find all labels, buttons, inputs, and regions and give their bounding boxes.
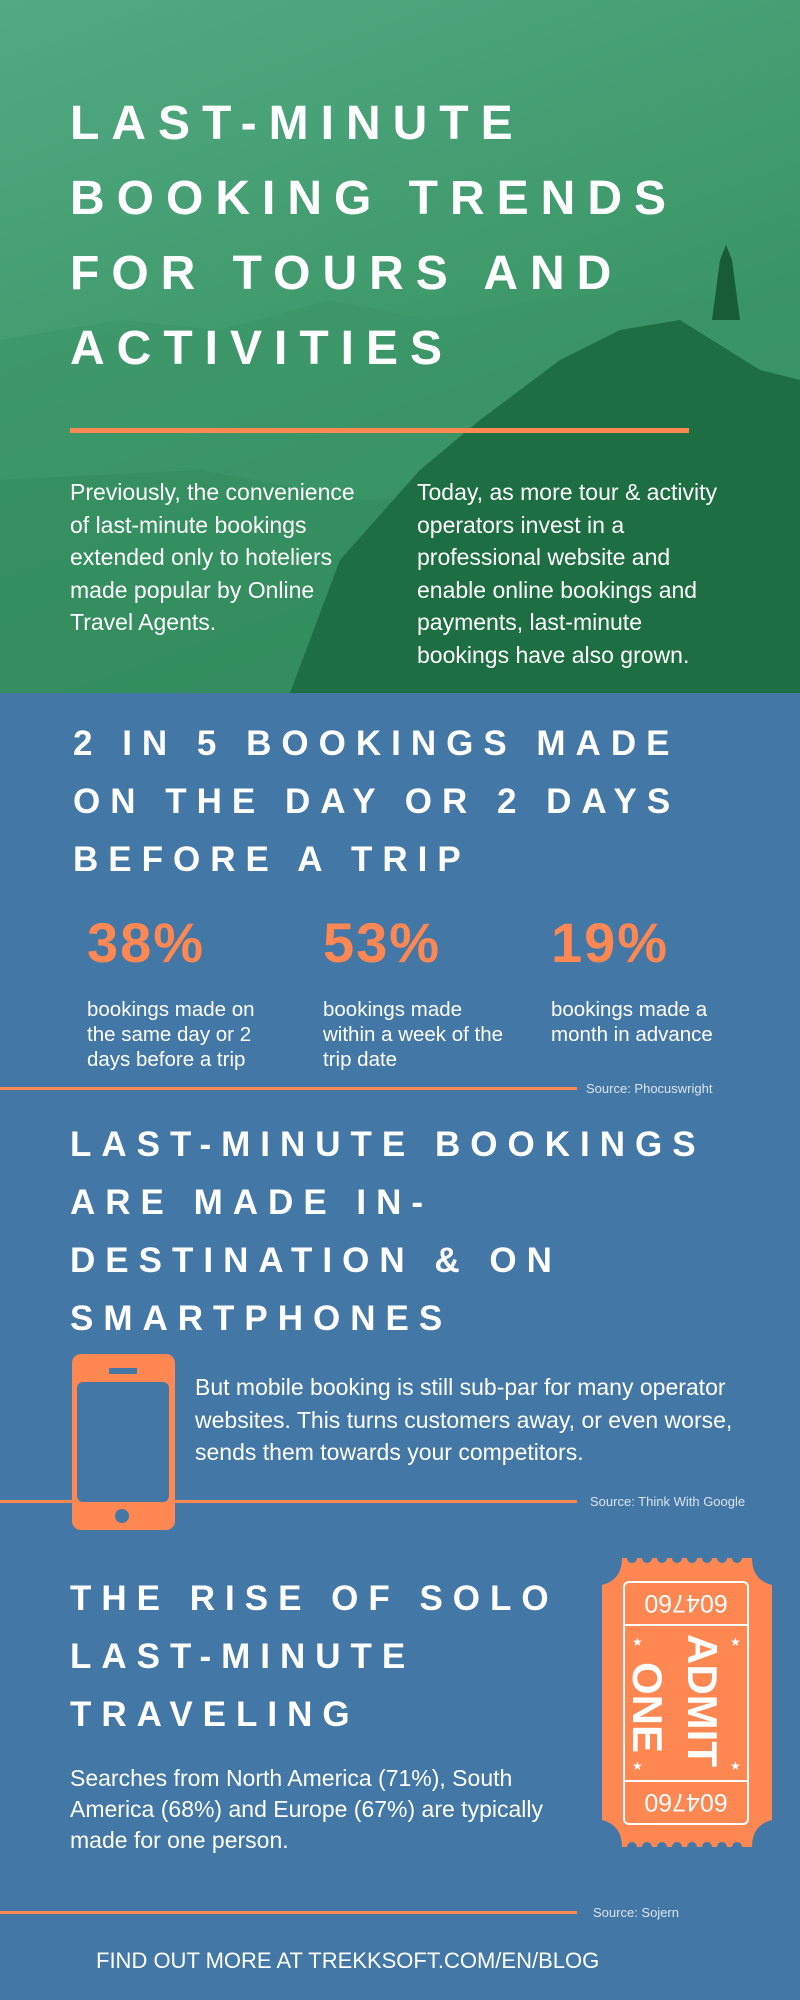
heading: last-minute bookings in-destination: DESTINATION & ON bbox=[70, 1241, 562, 1280]
divider with source bbox=[0, 1087, 577, 1090]
intro text left: Previously, the convenience of last-minute bookings extended only to hoteliers made popular by Online Travel Agents. bbox=[70, 479, 355, 635]
icon: admit one ticket: ★ bbox=[632, 1635, 643, 1649]
title underline bbox=[70, 428, 689, 433]
icon: admit one ticket: 604760 bbox=[644, 1788, 728, 1816]
title: BOOKING TRENDS bbox=[70, 172, 678, 225]
title bbox=[70, 97, 678, 375]
heading: last-minute bookings in-destination: LAST-MINUTE BOOKINGS bbox=[70, 1125, 706, 1164]
title: FOR TOURS AND bbox=[70, 247, 623, 300]
footer call to action: FIND OUT MORE AT TREKKSOFT.COM/EN/BLOG bbox=[96, 1948, 599, 1973]
heading: last-minute bookings in-destination: ARE MADE IN- bbox=[70, 1183, 433, 1222]
stat: 19%: bookings made a month in advance bbox=[551, 998, 713, 1046]
stat: 53%: 53% bbox=[323, 911, 441, 974]
title: LAST-MINUTE bbox=[70, 97, 525, 150]
icon: admit one ticket: 604760 bbox=[644, 1589, 728, 1617]
source: Think With Google: Source: Think With Google bbox=[590, 1494, 745, 1509]
stat: 53%: bookings made within a week of the trip date bbox=[323, 998, 503, 1071]
header: green hero with mountains bbox=[0, 0, 800, 693]
heading: 2 in 5 bookings bbox=[73, 724, 680, 879]
icon: admit one ticket: ONE bbox=[624, 1662, 671, 1753]
heading: 2 in 5 bookings: 2 IN 5 BOOKINGS MADE bbox=[73, 724, 679, 763]
icon: admit one ticket: ★ bbox=[730, 1759, 741, 1773]
heading: last-minute bookings in-destination: SMARTPHONES bbox=[70, 1299, 452, 1338]
title: ACTIVITIES bbox=[70, 322, 454, 375]
heading: rise of solo travel: LAST-MINUTE bbox=[70, 1637, 415, 1676]
stat: 38% bbox=[87, 911, 255, 1071]
stat: 38%: 38% bbox=[87, 911, 205, 974]
stat: 53% bbox=[323, 911, 503, 1071]
icon: admit one ticket bbox=[602, 1558, 772, 1847]
stat: 38%: bookings made on the same day or 2 days before a trip bbox=[87, 998, 255, 1071]
source: Sojern: Source: Sojern bbox=[593, 1905, 679, 1920]
icon: admit one ticket: ADMIT bbox=[679, 1634, 726, 1767]
stat: 19% bbox=[551, 911, 713, 1046]
icon: admit one ticket: ★ bbox=[632, 1759, 643, 1773]
heading: rise of solo travel bbox=[70, 1579, 559, 1734]
source: Phocuswright: Source: Phocuswright bbox=[586, 1081, 712, 1096]
divider 3 bbox=[0, 1911, 577, 1914]
icon: admit one ticket: ★ bbox=[730, 1635, 741, 1649]
icon: smartphone bbox=[72, 1354, 175, 1530]
solo text: Searches from North America (71%), South America (68%) and Europe (67%) are typically made for one person. bbox=[70, 1765, 543, 1853]
heading: 2 in 5 bookings: ON THE DAY OR 2 DAYS bbox=[73, 782, 680, 821]
divider 2 bbox=[0, 1500, 577, 1503]
heading: rise of solo travel: THE RISE OF SOLO bbox=[70, 1579, 559, 1618]
heading: rise of solo travel: TRAVELING bbox=[70, 1695, 360, 1734]
heading: last-minute bookings in-destination bbox=[70, 1125, 706, 1338]
heading: 2 in 5 bookings: BEFORE A TRIP bbox=[73, 840, 471, 879]
intro text right: Today, as more tour & activity operators invest in a professional website and enable online bookings and payments, last-minute bookings have also grown. bbox=[417, 479, 717, 668]
mobile text: But mobile booking is still sub-par for many operator websites. This turns customers away, or even worse, sends them towards your competitors. bbox=[195, 1374, 732, 1465]
stat: 19%: 19% bbox=[551, 911, 669, 974]
